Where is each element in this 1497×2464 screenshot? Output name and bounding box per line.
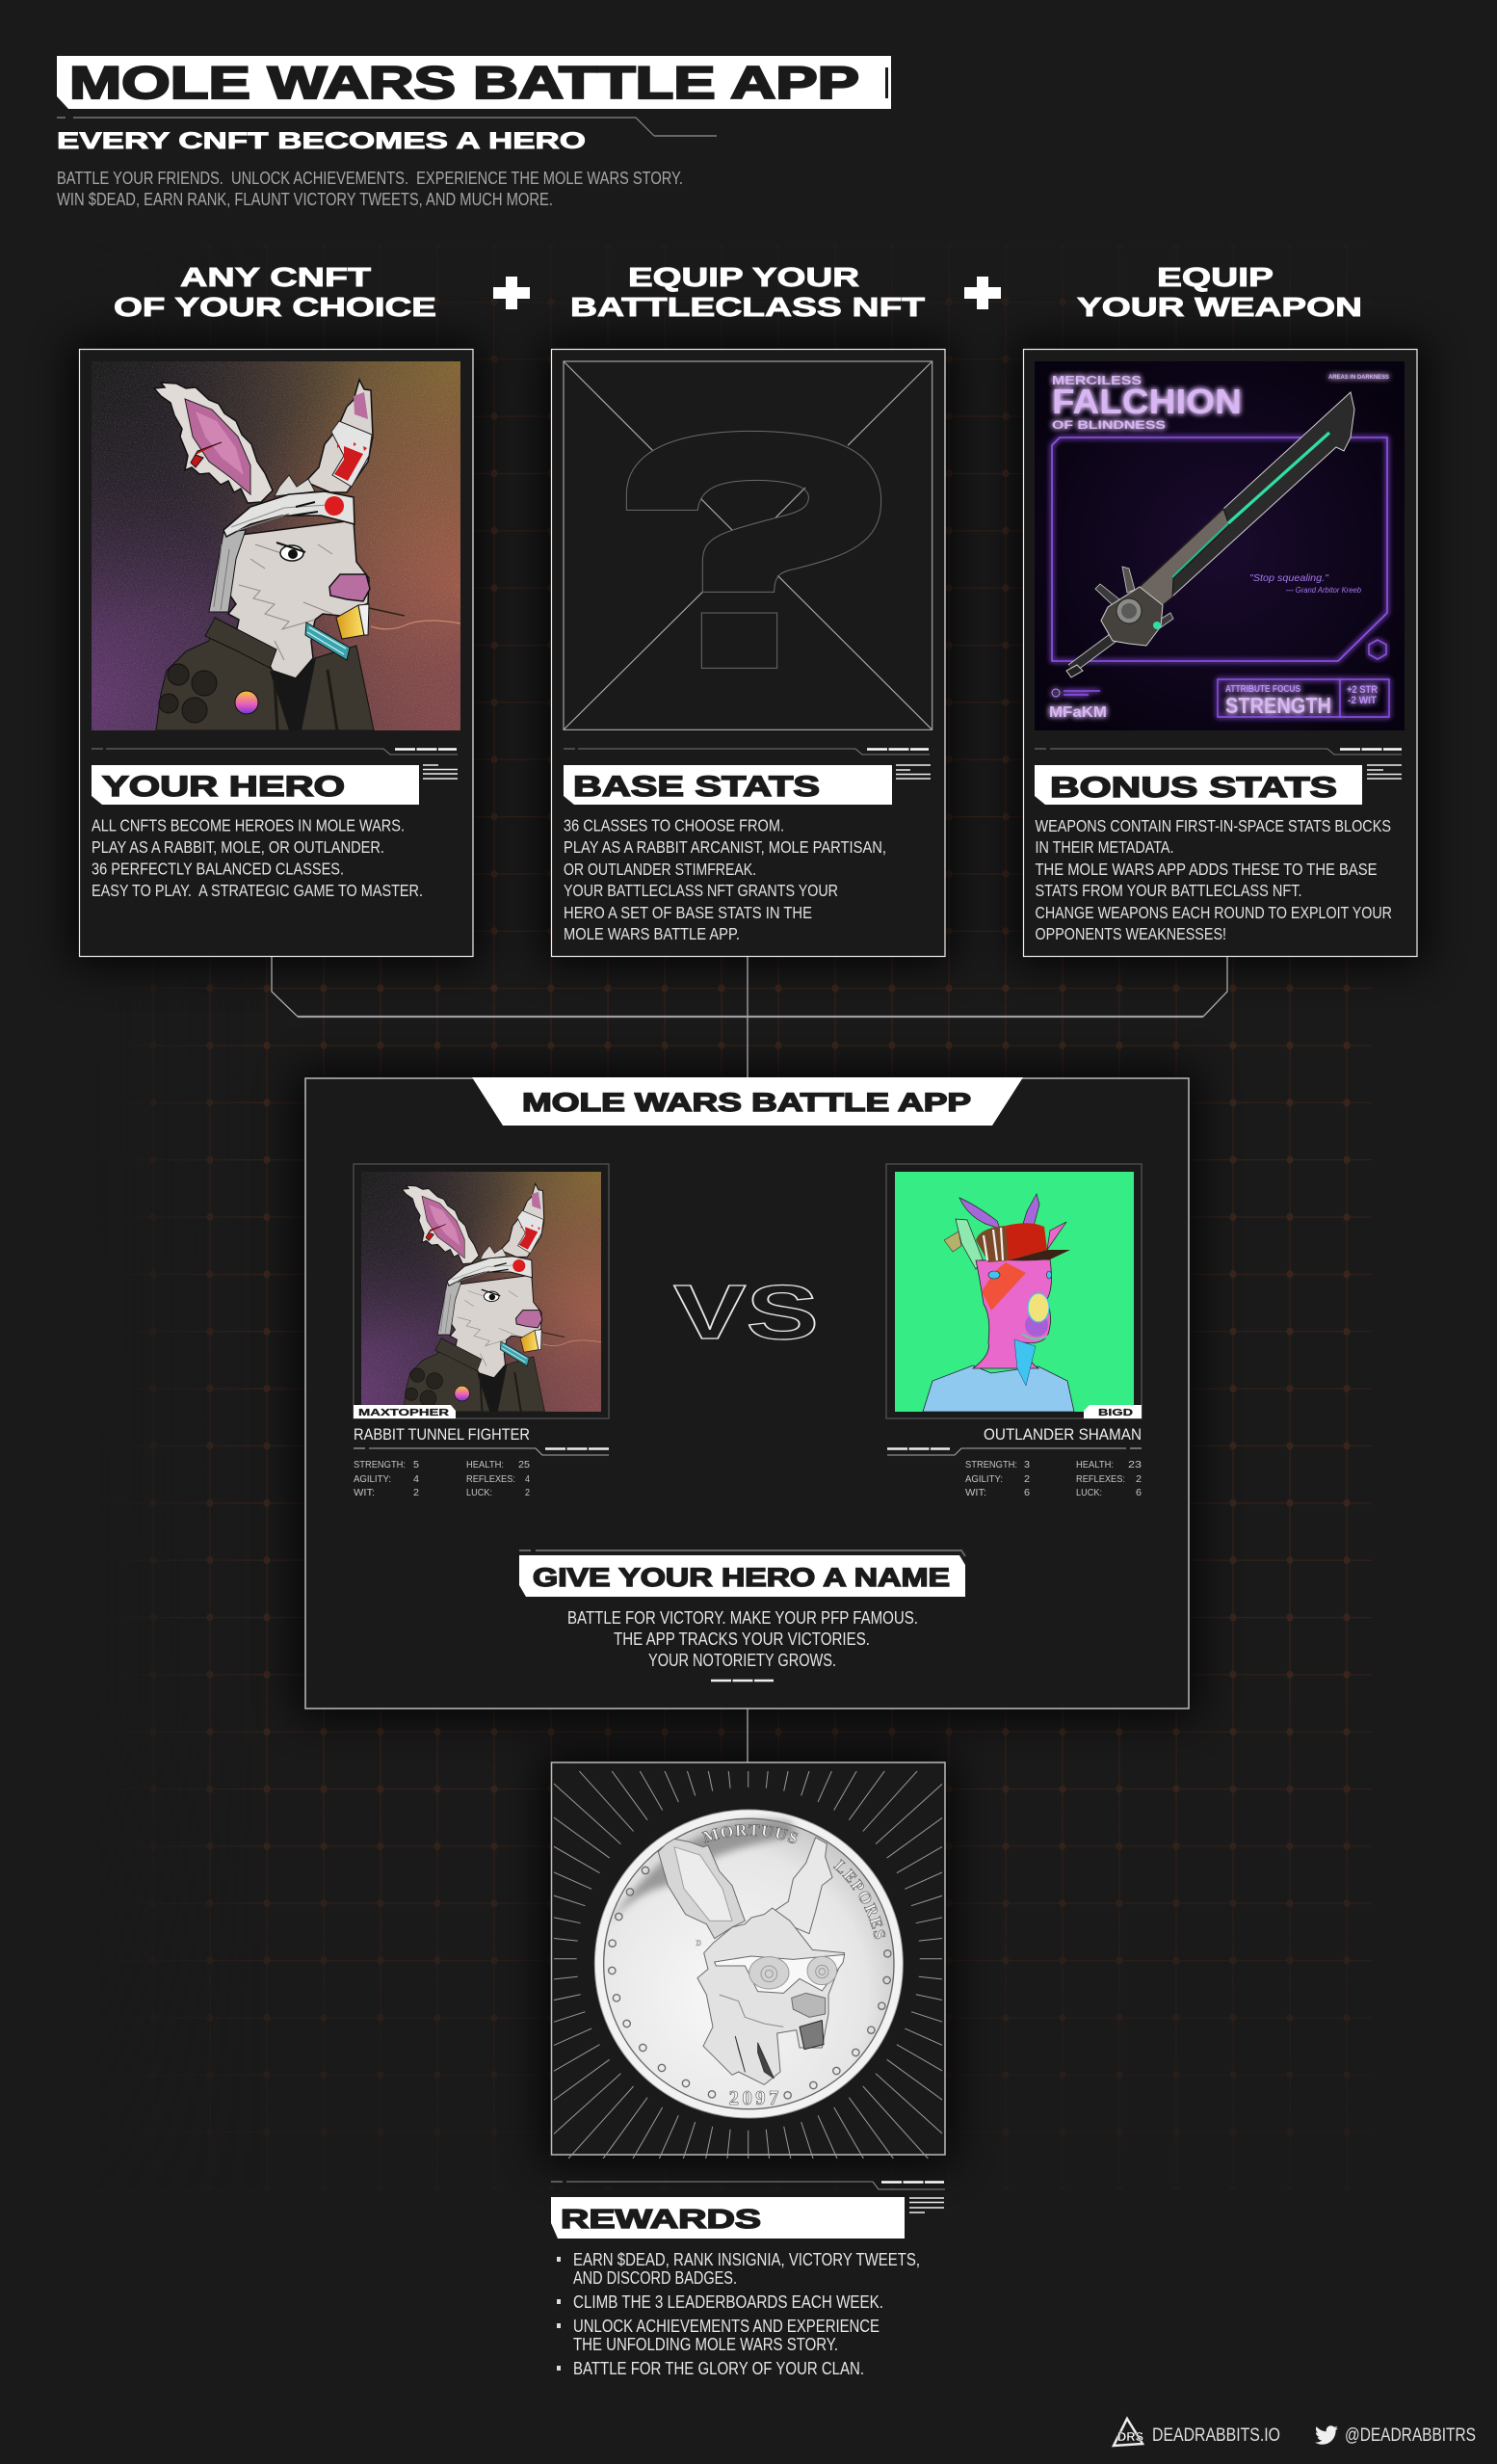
opponent stats: WIT: [965, 1487, 986, 1498]
text block: EASY TO PLAY. A STRATEGIC GAME TO MASTER. [92, 881, 423, 900]
opponent stats: LUCK: [1076, 1487, 1102, 1498]
rewards list: THE UNFOLDING MOLE WARS STORY. [573, 2335, 838, 2354]
heading: any cnft [114, 262, 436, 322]
title [57, 56, 891, 109]
text block: YOUR BATTLECLASS NFT GRANTS YOUR [564, 881, 838, 900]
quote: — Grand Arbitor Kreeb [1285, 586, 1362, 595]
heading: rewards [551, 2197, 905, 2239]
text block [567, 1608, 918, 1670]
title: MOLE WARS BATTLE APP [69, 57, 859, 108]
nameplate: BIGD [1098, 1408, 1133, 1418]
side lines [423, 765, 458, 779]
rewards list: BATTLE FOR THE GLORY OF YOUR CLAN. [573, 2359, 864, 2378]
text block: YOUR NOTORIETY GROWS. [648, 1651, 836, 1670]
image: falchion weapon card: ATTRIBUTE FOCUS [1225, 684, 1300, 695]
title rule [57, 118, 717, 136]
heading: give your hero a name: GIVE YOUR HERO A NAME [533, 1563, 950, 1592]
icon: dead rabbits logo: DRS [1117, 2429, 1143, 2444]
text block: OR OUTLANDER STIMFREAK. [564, 860, 756, 879]
coin inscription: LEPORES [832, 1859, 886, 1939]
hud rule [551, 2182, 945, 2189]
silver coin [593, 1810, 904, 2118]
image: falchion weapon card: STRENGTH [1225, 693, 1331, 718]
tab heading: MOLE WARS BATTLE APP [522, 1088, 971, 1117]
panel: base stats [551, 349, 945, 956]
rays [554, 1771, 942, 2159]
opponent stats: STRENGTH: [965, 1459, 1017, 1470]
hud rule [1035, 749, 1402, 755]
side lines [1367, 765, 1402, 779]
coin inscription: D [696, 1939, 701, 1947]
hero stats: 5 [413, 1459, 419, 1470]
opponent stats: 2 [1136, 1473, 1142, 1485]
hero stats: 25 [518, 1459, 530, 1470]
image: falchion weapon card: -2 WIT [1348, 695, 1377, 706]
portrait: hero card [354, 1164, 609, 1418]
hud rule [519, 1550, 965, 1556]
image: falchion weapon card: OF BLINDNESS [1052, 418, 1166, 432]
text block [92, 815, 423, 900]
hero stats: WIT: [354, 1487, 375, 1498]
class name: RABBIT TUNNEL FIGHTER [354, 1425, 530, 1444]
heading: equip weapon: EQUIP [1157, 262, 1274, 292]
text block [1035, 816, 1392, 943]
heading: bonus stats: BONUS STATS [1050, 772, 1337, 804]
heading: bonus stats [1035, 765, 1362, 805]
hero stats: 4 [413, 1473, 419, 1485]
tab heading [472, 1077, 1023, 1126]
opponent stats: 6 [1136, 1487, 1142, 1498]
text block: OPPONENTS WEAKNESSES! [1035, 924, 1226, 943]
connectors [272, 956, 1227, 1762]
text block: THE APP TRACKS YOUR VICTORIES. [614, 1629, 870, 1649]
hero stats: 4 [525, 1473, 530, 1485]
hud rule [354, 1448, 609, 1455]
rewards list: UNLOCK ACHIEVEMENTS AND EXPERIENCE [573, 2317, 880, 2336]
hero stats: LUCK: [466, 1487, 492, 1498]
panel: your hero [79, 349, 473, 956]
heading: equip weapon: YOUR WEAPON [1077, 292, 1362, 322]
heading: rewards: REWARDS [561, 2204, 761, 2234]
nameplate [354, 1405, 456, 1418]
text block: PLAY AS A RABBIT, MOLE, OR OUTLANDER. [92, 837, 384, 857]
text block: ALL CNFTS BECOME HEROES IN MOLE WARS. [92, 815, 405, 835]
heading: give your hero a name [519, 1555, 965, 1597]
hud rule [564, 749, 930, 755]
heading: equip battleclass: BATTLECLASS NFT [570, 292, 925, 322]
icon: plus [964, 277, 1001, 309]
nameplate [1084, 1405, 1142, 1418]
opponent stats: AGILITY: [965, 1473, 1003, 1485]
hero stats: AGILITY: [354, 1473, 391, 1485]
text block: WEAPONS CONTAIN FIRST-IN-SPACE STATS BLOCKS [1035, 816, 1391, 835]
intro text [57, 169, 683, 209]
hero stats: 2 [525, 1487, 530, 1498]
heading: base stats [564, 765, 892, 805]
image: falchion weapon card: +2 STR [1347, 684, 1378, 696]
quote: "Stop squealing." [1249, 572, 1329, 584]
panel: bonus stats [1023, 349, 1417, 956]
panel shadows [71, 342, 1425, 2162]
hud rule [92, 749, 458, 755]
vs: VS [673, 1269, 819, 1355]
opponent stats: REFLEXES: [1076, 1473, 1125, 1485]
text block [564, 815, 886, 943]
icon: dead rabbits logo [1114, 2419, 1143, 2446]
image: falchion weapon card: AREAS IN DARKNESS [1328, 374, 1390, 381]
heading: equip weapon [1077, 262, 1362, 322]
heading: equip battleclass: EQUIP YOUR [628, 262, 859, 292]
footer website: DEADRABBITS.IO [1152, 2425, 1280, 2446]
coin rabbit [658, 1838, 845, 2084]
opponent stats: 6 [1024, 1487, 1030, 1498]
text block: CHANGE WEAPONS EACH ROUND TO EXPLOIT YOUR [1035, 903, 1392, 922]
background grid [96, 245, 1372, 2189]
image: question mark placeholder [564, 361, 932, 729]
opponent stats: 23 [1128, 1459, 1142, 1470]
opponent stats [965, 1459, 1142, 1498]
heading: base stats: BASE STATS [573, 771, 820, 803]
subtitle: EVERY CNFT BECOMES A HERO [57, 128, 586, 154]
text block: STATS FROM YOUR BATTLECLASS NFT. [1035, 881, 1302, 900]
hero stats: REFLEXES: [466, 1473, 515, 1485]
title bar [57, 56, 891, 109]
panel: battle app [305, 1077, 1189, 1709]
intro text: BATTLE YOUR FRIENDS. UNLOCK ACHIEVEMENTS. EXPERIENCE THE MOLE WARS STORY. [57, 169, 683, 188]
hero stats: 2 [413, 1487, 419, 1498]
image: falchion weapon card [1035, 361, 1405, 730]
opponent stats: HEALTH: [1076, 1459, 1114, 1470]
image: rabbit hero [92, 361, 460, 730]
coin inscription: MORTUUS [701, 1824, 798, 1843]
heading: any cnft: OF YOUR CHOICE [114, 292, 436, 322]
text block: 36 CLASSES TO CHOOSE FROM. [564, 815, 784, 835]
portrait: opponent card [886, 1164, 1142, 1418]
nameplate: MAXTOPHER [358, 1408, 450, 1418]
text block: HERO A SET OF BASE STATS IN THE [564, 903, 812, 922]
text block: IN THEIR METADATA. [1035, 837, 1173, 857]
rewards list [557, 2250, 920, 2378]
heading: your hero [92, 765, 419, 805]
intro text: WIN $DEAD, EARN RANK, FLAUNT VICTORY TWEETS, AND MUCH MORE. [57, 190, 553, 209]
heading: any cnft: ANY CNFT [180, 262, 371, 292]
hud rule [887, 1448, 1142, 1455]
panel: rewards coin [551, 1762, 946, 2159]
heading: your hero: YOUR HERO [102, 771, 345, 803]
text block: BATTLE FOR VICTORY. MAKE YOUR PFP FAMOUS. [567, 1608, 918, 1628]
class name: OUTLANDER SHAMAN [984, 1425, 1142, 1444]
side lines [896, 765, 931, 779]
rewards list: CLIMB THE 3 LEADERBOARDS EACH WEEK. [573, 2292, 883, 2312]
opponent stats: 2 [1024, 1473, 1030, 1485]
hero stats: HEALTH: [466, 1459, 504, 1470]
text block: MOLE WARS BATTLE APP. [564, 924, 740, 943]
image: falchion weapon card: MFaKM [1049, 704, 1107, 721]
icon: plus [493, 277, 530, 309]
opponent stats: 3 [1024, 1459, 1030, 1470]
side lines [909, 2198, 944, 2212]
text block: PLAY AS A RABBIT ARCANIST, MOLE PARTISAN, [564, 837, 886, 857]
rewards list: AND DISCORD BADGES. [573, 2268, 737, 2288]
image: goat [895, 1172, 1134, 1412]
text block: THE MOLE WARS APP ADDS THESE TO THE BASE [1035, 860, 1378, 879]
sword [1066, 392, 1354, 677]
hero stats [354, 1459, 530, 1498]
hero stats: STRENGTH: [354, 1459, 406, 1470]
image: falchion weapon card: MERCILESS [1052, 373, 1142, 387]
coin inscription: 2097 [729, 2088, 778, 2109]
icon: twitter bird [1315, 2425, 1338, 2445]
rewards list: EARN $DEAD, RANK INSIGNIA, VICTORY TWEETS, [573, 2250, 920, 2269]
image: falchion weapon card: FALCHION [1052, 382, 1242, 421]
quote [1249, 572, 1362, 595]
text block: 36 PERFECTLY BALANCED CLASSES. [92, 860, 344, 879]
heading: equip battleclass [570, 262, 925, 322]
coin inscription [696, 1824, 886, 2109]
